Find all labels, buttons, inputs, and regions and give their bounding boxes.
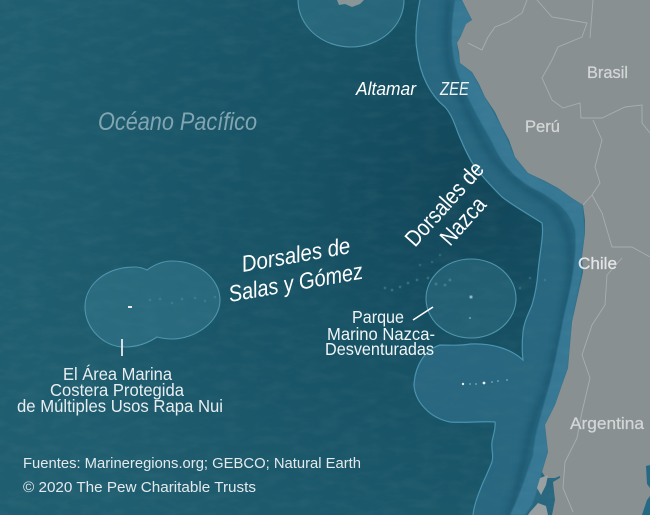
panel: exclusive economic zone xyxy=(413,0,585,515)
callout: Parque Marino Nazca-Desventuradas: Parque xyxy=(352,307,404,327)
label: Dorsales de Salas y Gómez: Salas y Gómez xyxy=(226,258,365,307)
callout: Rapa Nui: de Múltiples Usos Rapa Nui xyxy=(17,396,223,416)
label: Dorsales de Salas y Gómez xyxy=(226,232,365,307)
label: Altamar: Altamar xyxy=(355,79,417,99)
label: ZEE: ZEE xyxy=(439,79,470,99)
heading: Océano Pacífico: Océano Pacífico xyxy=(98,108,257,136)
label: Chile: Chile xyxy=(578,254,617,273)
icon: southern islands xyxy=(528,475,564,515)
panel: Rapa Nui protected area xyxy=(85,261,220,347)
label: Brasil: Brasil xyxy=(587,63,628,82)
coastal shelf xyxy=(452,0,585,515)
callout: Parque Marino Nazca-Desventuradas: Desventuradas xyxy=(325,339,434,359)
coastal trench band xyxy=(446,0,571,515)
label: Dorsales de Nazca: Nazca xyxy=(434,191,491,250)
callout: Parque Marino Nazca-Desventuradas xyxy=(325,307,435,359)
panel: land xyxy=(457,0,650,515)
source note: Fuentes: Marineregions.org; GEBCO; Natural Earth xyxy=(23,456,361,472)
callout: Rapa Nui: El Área Marina xyxy=(63,364,172,384)
label: Dorsales de Nazca: Dorsales de xyxy=(399,156,489,251)
icon: islands xyxy=(337,0,364,7)
San Félix islands xyxy=(462,379,508,385)
label: Perú: Perú xyxy=(525,117,560,136)
panel: Parque Marino Nazca-Desventuradas area xyxy=(426,259,516,338)
callout: Parque Marino Nazca-Desventuradas: Marino Nazca- xyxy=(327,324,435,344)
label: Argentina: Argentina xyxy=(570,414,645,433)
copyright note: © 2020 The Pew Charitable Trusts xyxy=(23,480,256,496)
national borders xyxy=(468,0,650,512)
seamount chain: Salas y Gómez and Nazca ridges xyxy=(149,254,546,304)
panel: Galápagos protected area xyxy=(298,0,404,47)
label: Dorsales de Salas y Gómez: Dorsales de xyxy=(239,232,352,277)
callout: Rapa Nui xyxy=(17,339,223,416)
Atlantic sliver xyxy=(642,465,650,515)
callout: Rapa Nui: Costera Protegida xyxy=(50,380,184,400)
